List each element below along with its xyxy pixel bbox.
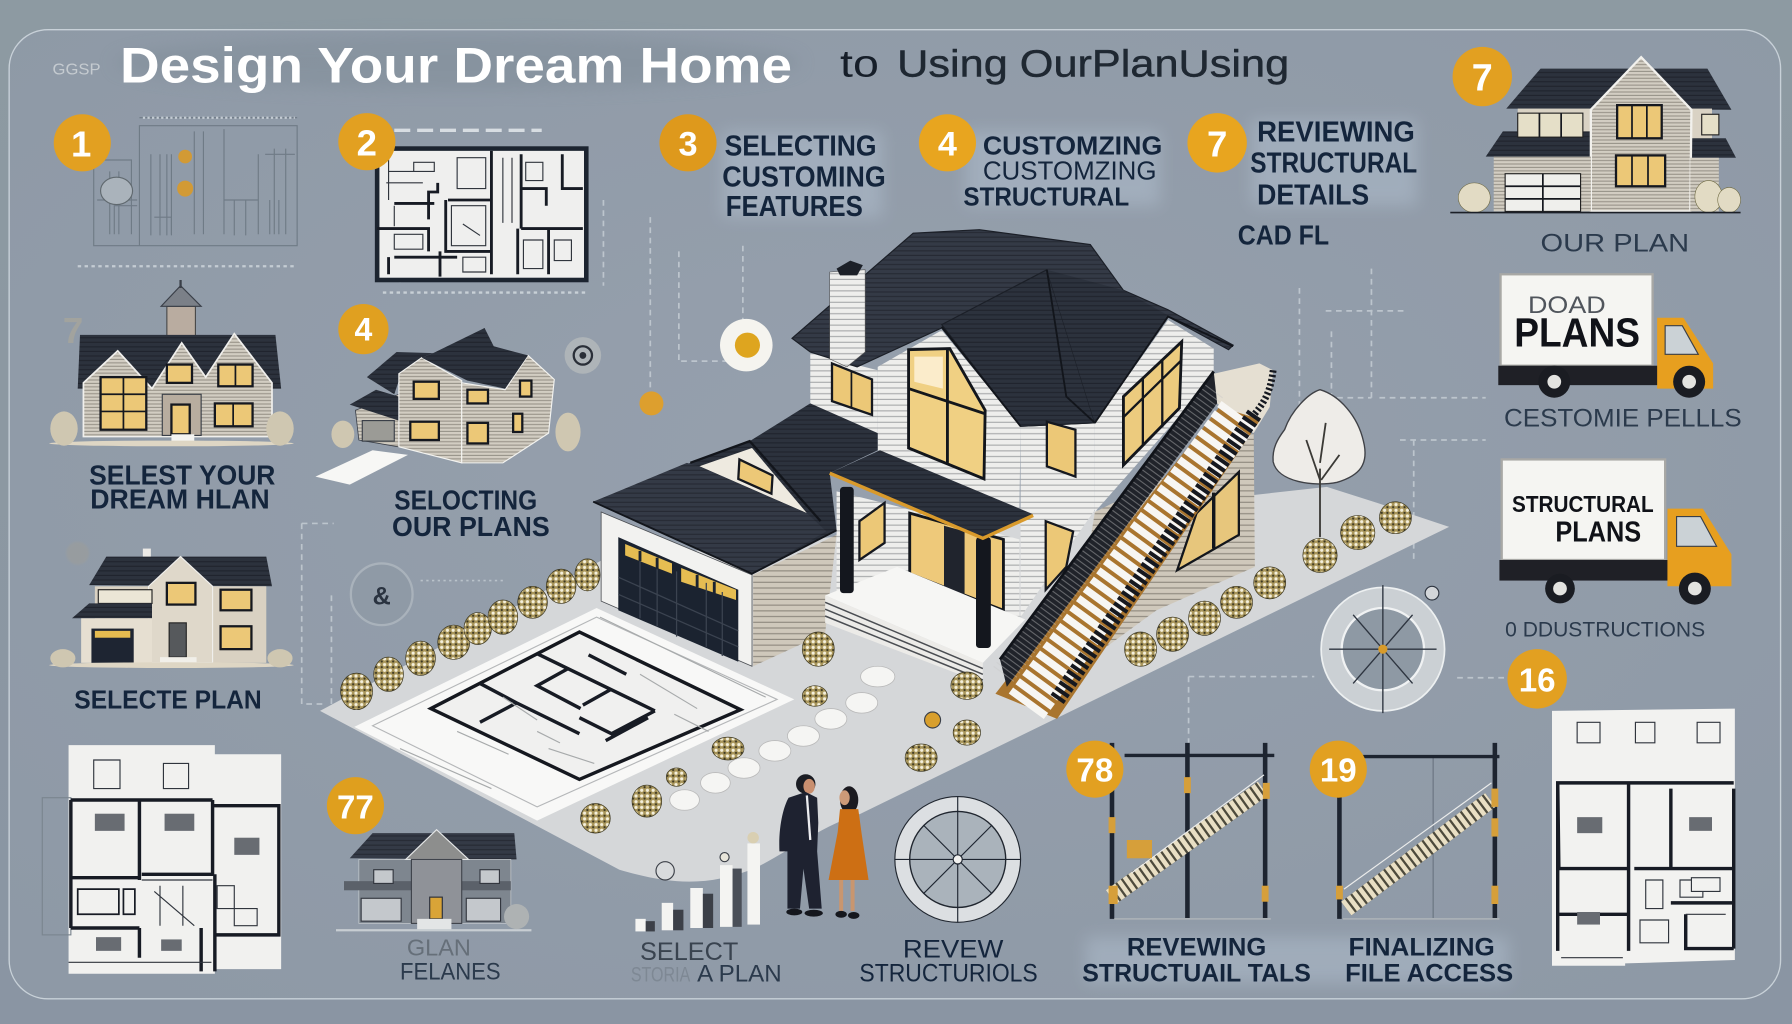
badge 7 top right bbox=[1453, 47, 1512, 106]
garage front bbox=[601, 512, 752, 666]
label: review structural: STRUCTURIOLS bbox=[859, 960, 1038, 988]
badge 3: 3 bbox=[678, 125, 698, 163]
badge 4: 4 bbox=[938, 125, 957, 163]
label: finalizing file access bbox=[1345, 933, 1513, 988]
badge 2: 2 bbox=[357, 122, 377, 163]
label: plan features: FELANES bbox=[400, 958, 501, 985]
badge 1: 1 bbox=[71, 124, 91, 165]
badge 3 bbox=[659, 114, 717, 171]
label: finalizing file access: FILE ACCESS bbox=[1345, 960, 1513, 988]
label: selecting customing features bbox=[722, 130, 886, 223]
title: design your dream home: Using OurPlanUsing bbox=[897, 43, 1289, 85]
lower right wall bbox=[1069, 433, 1255, 674]
porch steps bbox=[825, 595, 983, 683]
truck: CAD plans: PLANS bbox=[1514, 309, 1640, 355]
porch windows bbox=[859, 503, 1003, 610]
badge 77 house: grey illustration bbox=[336, 830, 531, 930]
badge 7: 7 bbox=[1207, 124, 1227, 165]
truck: structural plans: PLANS bbox=[1555, 517, 1641, 549]
tower windows bbox=[1046, 422, 1075, 590]
icon: ringed symbol bbox=[351, 563, 503, 625]
truck: structural plans bbox=[1499, 459, 1731, 605]
porch back wall bbox=[837, 491, 1019, 617]
middle tower wall bbox=[1021, 423, 1095, 617]
front shrub row bbox=[341, 559, 600, 710]
label: select your dream plan bbox=[89, 460, 276, 515]
ground plate bbox=[320, 487, 1449, 882]
label: customzing structural bbox=[963, 130, 1162, 212]
porch floor bbox=[825, 567, 1025, 663]
icon: ringed symbol: & bbox=[373, 583, 391, 611]
house illustration: selecting our plans bbox=[315, 328, 581, 485]
label: selecting our plans bbox=[392, 485, 550, 542]
label: reviewing structural details: STRUCTURAL bbox=[1250, 148, 1417, 180]
small upper window bbox=[832, 363, 872, 415]
right gable wall bbox=[1095, 320, 1214, 512]
stair frame 19 bbox=[1336, 743, 1499, 919]
chimney bbox=[830, 261, 865, 367]
bar chart bbox=[635, 832, 760, 931]
badge 4 small: 4 bbox=[355, 312, 373, 348]
connector and garage rear roof bbox=[593, 403, 878, 574]
label: select a plan: SELECT bbox=[640, 938, 738, 966]
badge 19 bbox=[1310, 741, 1367, 798]
badge 1 bbox=[54, 114, 111, 171]
truck: structural plans: STRUCTURAL bbox=[1512, 491, 1654, 517]
label: selecting customing features: FEATURES bbox=[726, 191, 863, 223]
label: select plan: SELECTE PLAN bbox=[74, 685, 262, 715]
porch roof bbox=[830, 450, 1033, 538]
title: design your dream home: to bbox=[840, 43, 879, 85]
label: reviewing structural details bbox=[1250, 117, 1417, 212]
badge 4 bbox=[919, 114, 976, 171]
title: design your dream home: Design Your Dream Home bbox=[120, 36, 792, 93]
label: select a plan bbox=[631, 938, 782, 988]
house illustration: our plan bbox=[1450, 57, 1741, 213]
title: design your dream home: GGSP bbox=[53, 61, 101, 78]
main scene: isometric house on a plot bbox=[320, 230, 1449, 882]
ghost marker circle bbox=[66, 542, 89, 565]
icon: small circle dial bbox=[565, 337, 601, 374]
title: design your dream home bbox=[53, 35, 1289, 93]
compass dial bottom bbox=[895, 797, 1021, 922]
label: select a plan: STORIA bbox=[631, 962, 691, 987]
big gable window bbox=[909, 349, 985, 479]
rear upper wall bbox=[810, 353, 878, 433]
label: plan features: GLAN bbox=[407, 934, 471, 960]
back shrub row bbox=[581, 502, 1411, 833]
badge 19: 19 bbox=[1320, 753, 1357, 790]
dashed connector lines bbox=[302, 194, 1509, 743]
label: selecting our plans: SELOCTING bbox=[394, 485, 537, 516]
truck: CAD plans: DOAD bbox=[1528, 292, 1606, 319]
icon: gold dot bbox=[639, 391, 663, 415]
label: review structural: REVEW bbox=[903, 936, 1004, 964]
badge 16: 16 bbox=[1519, 662, 1556, 699]
label: select your dream plan: DREAM HLAN bbox=[90, 484, 270, 515]
staircase bbox=[995, 370, 1273, 719]
label: selecting our plans: OUR PLANS bbox=[392, 511, 550, 542]
label: reviewing structural details bottom: STRUCTUAIL TALS bbox=[1082, 960, 1311, 988]
badge 2 bbox=[338, 113, 395, 170]
badge 77: 77 bbox=[337, 789, 374, 826]
label: customzing structural: STRUCTURAL bbox=[963, 182, 1129, 212]
porch posts bbox=[840, 487, 991, 648]
floor plan 2: top blueprint bbox=[377, 130, 589, 293]
dormer bbox=[690, 441, 821, 521]
badge 7 top right: 7 bbox=[1472, 56, 1493, 98]
garden lamp bbox=[925, 712, 941, 728]
tree bbox=[1273, 390, 1365, 537]
floor plan: bottom left bbox=[42, 745, 281, 974]
stepping stones bbox=[670, 666, 895, 810]
person: man bbox=[779, 774, 823, 917]
main roof back bbox=[792, 230, 1233, 426]
truck: CAD plans bbox=[1498, 274, 1713, 398]
badge 16 bbox=[1507, 649, 1567, 709]
label: customize details: CESTOMIE PELLLS bbox=[1504, 404, 1742, 432]
badge 7 bbox=[1187, 113, 1247, 173]
label: reviewing structural details bottom bbox=[1082, 933, 1311, 988]
badge 77 bbox=[327, 777, 384, 834]
ghost marker 7: 7 bbox=[63, 310, 83, 351]
label: customzing structural: CUSTOMZING bbox=[983, 155, 1157, 185]
lower right window bbox=[1177, 472, 1239, 570]
label: finalizing file access: FINALIZING bbox=[1349, 933, 1495, 961]
icon: gold coin bbox=[720, 319, 773, 371]
label: constructions: 0 DDUSTRUCTIONS bbox=[1505, 617, 1705, 642]
right gable window bbox=[1123, 342, 1182, 465]
label: review structural bbox=[859, 936, 1038, 988]
label glow halos bbox=[722, 120, 1509, 983]
floor plan: bottom right bbox=[1552, 709, 1735, 966]
landing bbox=[1214, 363, 1273, 433]
label: customzing structural: CUSTOMZING bbox=[983, 130, 1162, 160]
badge 78: 78 bbox=[1076, 753, 1113, 790]
main roof front gable bbox=[942, 270, 1095, 426]
label: reviewing structural details bottom: REVEWING bbox=[1127, 933, 1266, 961]
label: CAD files: CAD FL bbox=[1238, 220, 1329, 251]
label: selecting customing features: SELECTING bbox=[725, 130, 877, 162]
house illustration: select plan bbox=[49, 549, 294, 668]
label: selecting customing features: CUSTOMING bbox=[722, 161, 886, 193]
badge 4 small bbox=[338, 304, 389, 354]
compass dial right bbox=[1321, 585, 1445, 713]
garage roof bbox=[593, 463, 826, 574]
blueprint sheet bbox=[354, 608, 794, 821]
badge 78 bbox=[1066, 741, 1123, 798]
person: woman bbox=[829, 786, 869, 919]
label: select a plan: A PLAN bbox=[697, 961, 782, 988]
sketch 1: elevation drawing bbox=[78, 118, 297, 266]
label: plan features bbox=[400, 934, 501, 985]
label: our plan: OUR PLAN bbox=[1541, 229, 1689, 257]
stair frame 78 bbox=[1109, 743, 1274, 919]
garage door bbox=[618, 537, 738, 662]
label: reviewing structural details: DETAILS bbox=[1257, 180, 1369, 212]
label: reviewing structural details: REVIEWING bbox=[1257, 117, 1415, 149]
house illustration: select your dream plan bbox=[49, 280, 294, 446]
central gable wall bbox=[878, 330, 1021, 509]
label: select your dream plan: SELEST YOUR bbox=[89, 460, 276, 491]
garage side wall bbox=[753, 535, 837, 666]
